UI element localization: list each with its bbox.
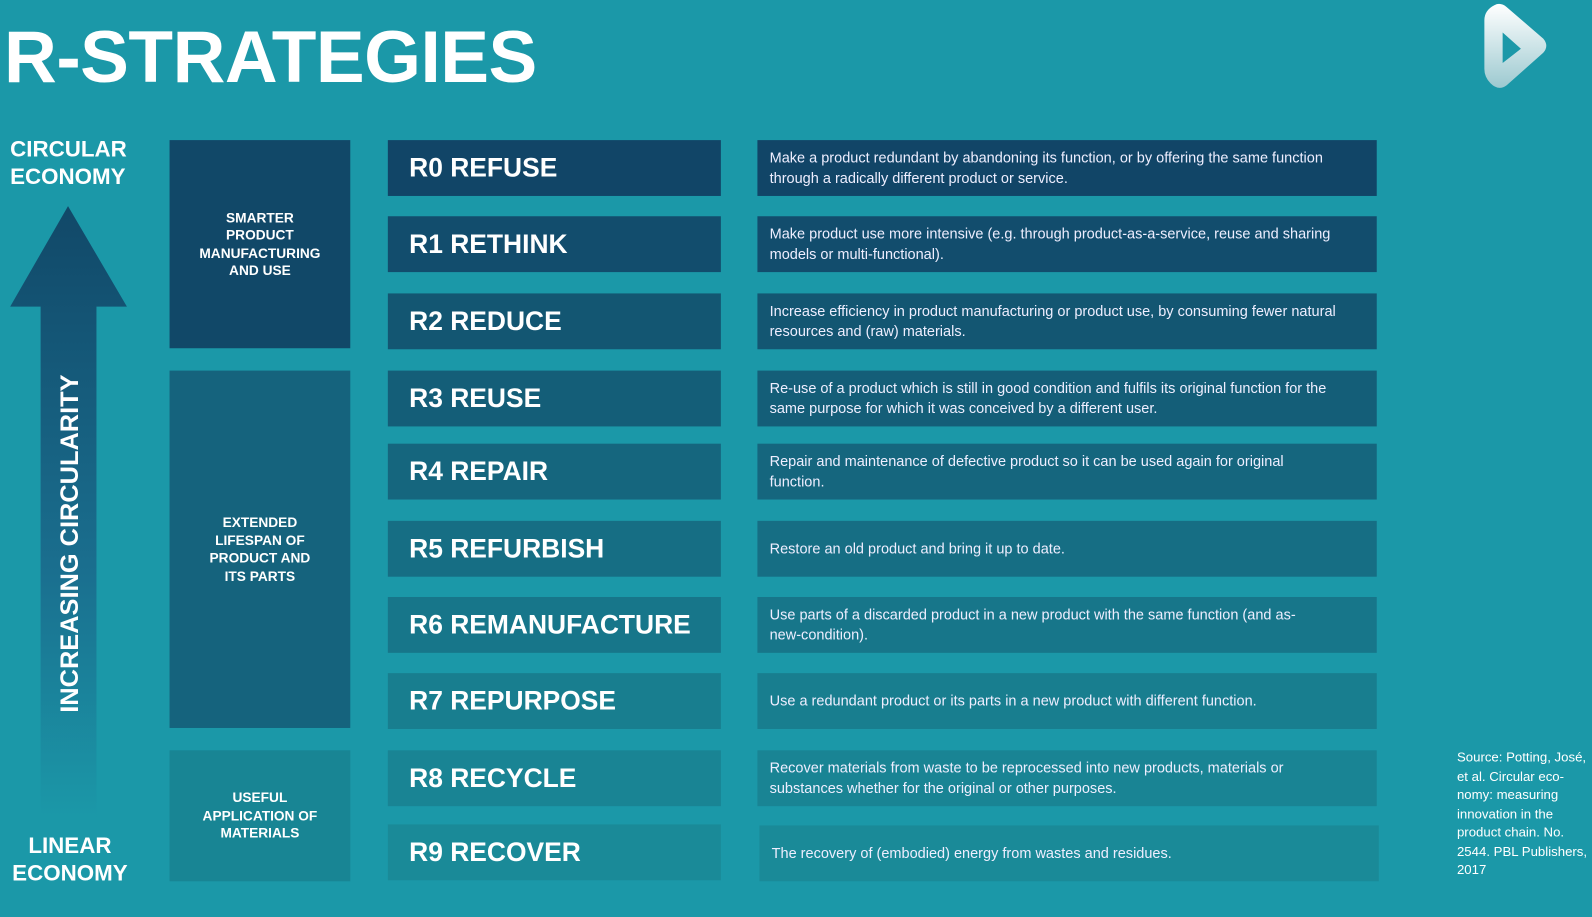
R0 desc xyxy=(757,140,1377,196)
panel: smarter product: AND USE xyxy=(229,263,291,278)
R7 xyxy=(388,673,721,729)
panel: useful application: APPLICATION OF xyxy=(203,808,317,823)
R6: R6 REMANUFACTURE xyxy=(409,609,691,640)
R8 desc xyxy=(757,750,1377,806)
panel: smarter product xyxy=(170,140,350,348)
R3 desc xyxy=(757,371,1377,426)
R8 desc: Recover materials from waste to be reprocessed into new products, materials or substances whether for the original or other purposes. xyxy=(770,760,1284,797)
R2: R2 REDUCE xyxy=(409,306,562,336)
R9 xyxy=(388,824,721,880)
panel: extended lifespan: LIFESPAN OF xyxy=(215,533,305,548)
title: R-STRATEGIES xyxy=(4,17,537,98)
label: circular economy xyxy=(10,136,127,189)
R3 desc: Re-use of a product which is still in good condition and fulfils its original function for the same purpose for which it was conceived by a different user. xyxy=(770,380,1326,417)
label: linear economy: LINEAR xyxy=(28,833,111,858)
R0: R0 REFUSE xyxy=(409,152,557,183)
panel: extended lifespan: PRODUCT AND xyxy=(210,550,310,566)
R7: R7 REPURPOSE xyxy=(409,685,616,716)
R4 desc: Repair and maintenance of defective product so it can be used again for original function. xyxy=(770,453,1284,490)
R0 desc: Make a product redundant by abandoning its function, or by offering the same function through a radically different product or service. xyxy=(770,150,1323,186)
label: linear economy xyxy=(12,833,128,885)
R8 xyxy=(388,750,721,806)
R0 xyxy=(388,140,721,196)
R2 desc: Increase efficiency in product manufacturing or product use, by consuming fewer natural resources and (raw) materials. xyxy=(770,303,1336,340)
R5: R5 REFURBISH xyxy=(409,533,604,563)
R1: R1 RETHINK xyxy=(409,228,568,259)
R7 desc: Use a redundant product or its parts in a new product with different function. xyxy=(770,693,1257,709)
R7 desc xyxy=(757,673,1377,729)
label: circular economy: ECONOMY xyxy=(10,163,126,189)
R4 desc xyxy=(757,444,1377,500)
panel: useful application: MATERIALS xyxy=(220,826,299,841)
R6 xyxy=(388,597,721,653)
label: circular economy: CIRCULAR xyxy=(10,136,127,161)
R9 desc: The recovery of (embodied) energy from wastes and residues. xyxy=(772,845,1172,861)
panel: extended lifespan: EXTENDED xyxy=(223,515,297,530)
panel: extended lifespan: ITS PARTS xyxy=(225,568,295,583)
R3: R3 REUSE xyxy=(409,383,541,413)
R5 desc: Restore an old product and bring it up to date. xyxy=(770,541,1065,557)
panel: smarter product: SMARTER xyxy=(226,210,294,225)
R2 xyxy=(388,293,721,349)
R9 desc xyxy=(759,825,1379,881)
panel: smarter product: PRODUCT xyxy=(226,227,294,243)
icon: logo xyxy=(1484,4,1546,88)
R5 desc xyxy=(757,521,1377,577)
panel: extended lifespan xyxy=(170,371,350,728)
R6 desc xyxy=(757,597,1377,653)
source note: Source: Potting, José, et al. Circular eco-nomy: measuring innovation in the product chain. No. 2544. PBL Publishers, 2017 xyxy=(1457,749,1587,877)
R8: R8 RECYCLE xyxy=(409,762,576,793)
arrow: increasing circularity: INCREASING CIRCULARITY xyxy=(56,374,84,713)
R5 xyxy=(388,521,721,577)
panel: useful application xyxy=(170,750,350,881)
R4 xyxy=(388,444,721,500)
R4: R4 REPAIR xyxy=(409,456,548,486)
R9: R9 RECOVER xyxy=(409,837,581,867)
R1 desc xyxy=(757,216,1377,272)
R1 xyxy=(388,216,721,272)
arrow: increasing circularity xyxy=(10,206,127,768)
panel: useful application: USEFUL xyxy=(233,790,287,805)
R1 desc: Make product use more intensive (e.g. through product-as-a-service, reuse and sharing models or multi-functional). xyxy=(770,226,1330,262)
R2 desc xyxy=(757,293,1377,349)
label: linear economy: ECONOMY xyxy=(12,860,128,885)
panel: smarter product: MANUFACTURING xyxy=(199,245,320,260)
R3 xyxy=(388,371,721,426)
R6 desc: Use parts of a discarded product in a new product with the same function (and as-new-condition). xyxy=(770,607,1296,643)
